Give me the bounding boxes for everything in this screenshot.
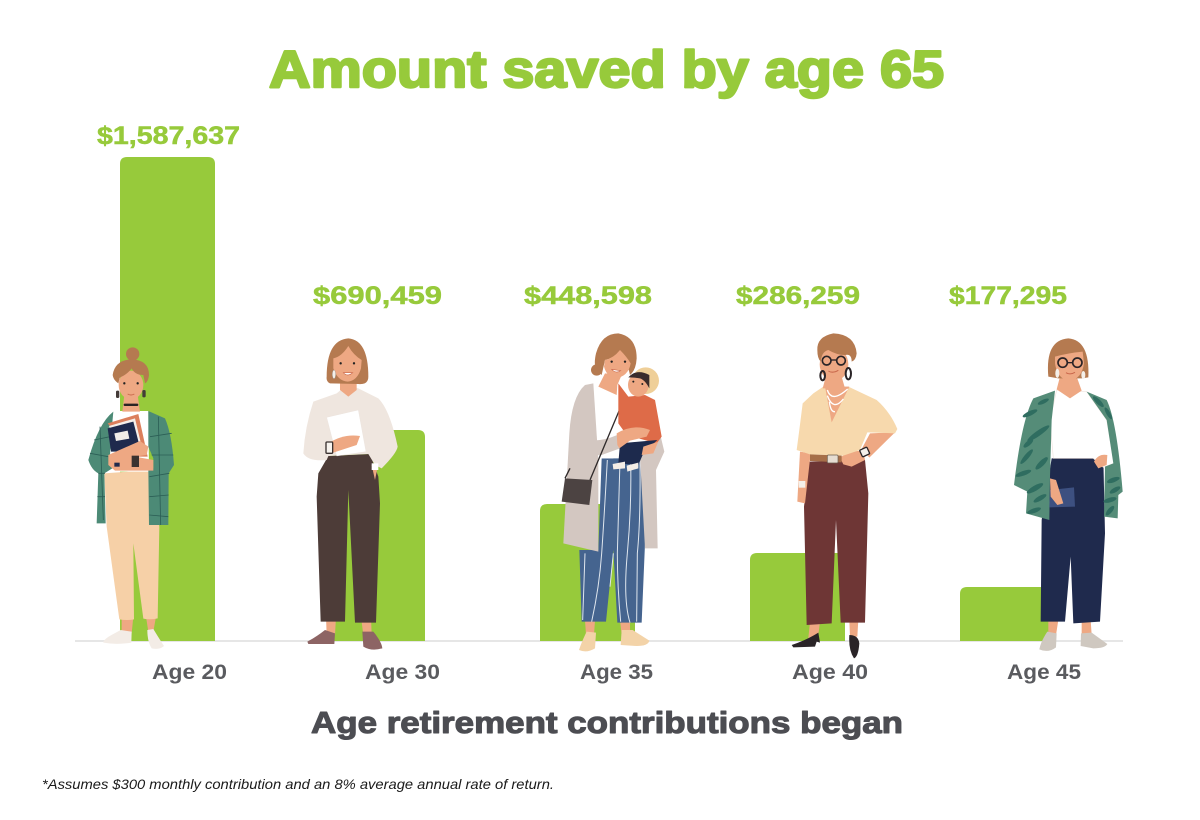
value: age 40: $286,259 [736,282,860,310]
label: age 40: Age 40 [792,661,868,684]
bar: age 45 [960,587,1055,641]
value: age 35: $448,598 [524,282,652,310]
figure: mother holding baby, age 35 [562,333,664,651]
figure: older woman in blouse, age 40 [792,333,897,658]
label: age 20: Age 20 [152,661,227,684]
figure: woman in green jacket, age 45 [1014,338,1123,651]
figure: woman with books, age 20 [88,347,174,649]
value: age 30: $690,459 [313,282,442,310]
bar: age 35 [540,504,635,641]
bar chart [120,157,1055,641]
baseline [75,640,1123,642]
label: age 30: Age 30 [365,661,440,684]
figure: woman with tablet, age 30 [303,338,398,650]
bar: age 40 [750,553,845,641]
axis title: Age retirement contributions began [311,705,903,740]
age labels [152,661,1081,684]
value labels [97,122,1067,310]
bar: age 20 [120,157,215,641]
label: age 45: Age 45 [1007,661,1081,684]
label: age 35: Age 35 [580,661,653,684]
footnote: *Assumes $300 monthly contribution and an 8% average annual rate of return. [42,776,554,792]
title: Amount saved by age 65 [269,41,944,99]
value: age 45: $177,295 [949,282,1067,310]
bar: age 30 [330,430,425,641]
value: age 20: $1,587,637 [97,122,240,150]
